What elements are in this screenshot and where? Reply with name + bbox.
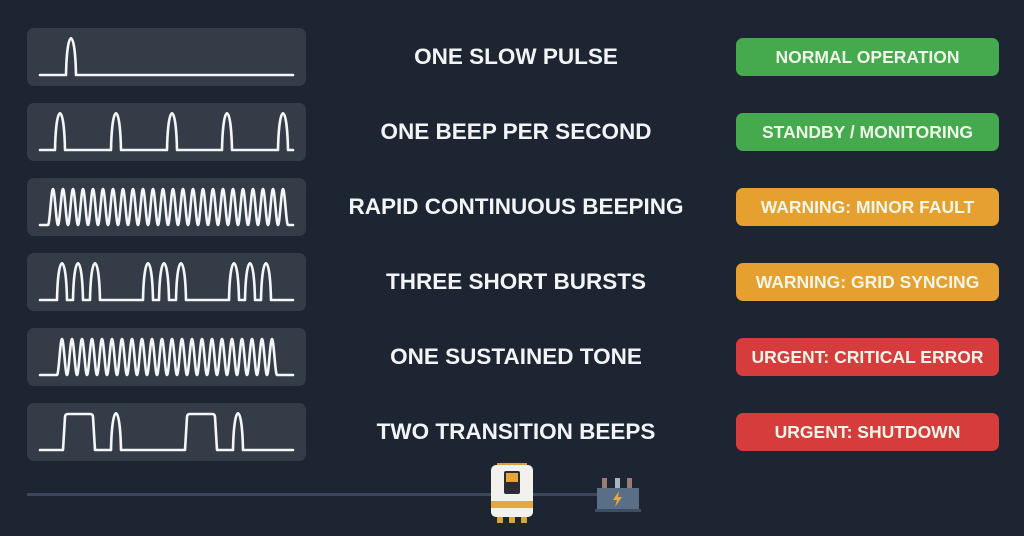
panel: waveform one beep per second — [27, 103, 306, 161]
badge: warning grid syncing — [736, 263, 999, 301]
icon: transformer — [595, 478, 641, 512]
panel: waveform two transition beeps — [27, 403, 306, 461]
badge: normal operation: NORMAL OPERATION — [775, 47, 960, 67]
badge: standby — [736, 113, 999, 151]
badge: urgent critical error: URGENT: CRITICAL ERROR — [751, 347, 984, 367]
badge: standby: STANDBY / MONITORING — [762, 122, 973, 142]
text: one sustained tone: ONE SUSTAINED TONE — [390, 344, 642, 369]
badge: warning minor fault — [736, 188, 999, 226]
text: one beep per second: ONE BEEP PER SECOND — [381, 119, 651, 144]
connection line — [27, 493, 602, 496]
text: rapid continuous beeping: RAPID CONTINUOUS BEEPING — [348, 194, 684, 219]
panel: waveform one slow pulse — [27, 28, 306, 86]
text: one slow pulse: ONE SLOW PULSE — [414, 44, 618, 69]
panel: waveform rapid continuous — [27, 178, 306, 236]
text: two transition beeps: TWO TRANSITION BEEPS — [377, 419, 655, 444]
badge: urgent critical error — [736, 338, 999, 376]
icon: inverter — [491, 463, 533, 523]
panel: waveform three short bursts — [27, 253, 306, 311]
badge: warning grid syncing: WARNING: GRID SYNCING — [756, 272, 979, 292]
badge: warning minor fault: WARNING: MINOR FAULT — [761, 197, 974, 217]
badge: urgent shutdown: URGENT: SHUTDOWN — [775, 422, 960, 442]
panel: waveform sustained tone — [27, 328, 306, 386]
badge: normal operation — [736, 38, 999, 76]
badge: urgent shutdown — [736, 413, 999, 451]
text: three short bursts: THREE SHORT BURSTS — [386, 269, 646, 294]
